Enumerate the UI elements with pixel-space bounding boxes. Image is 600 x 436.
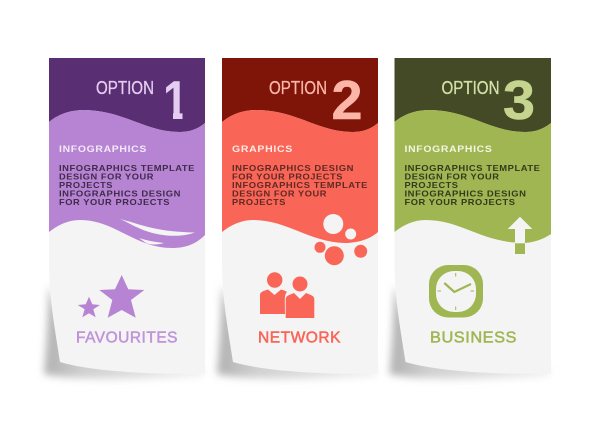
text block xyxy=(232,163,368,207)
subheading: GRAPHICS xyxy=(232,144,293,154)
panel: option 1 xyxy=(44,58,205,379)
text block xyxy=(59,163,195,207)
icon: bubbles xyxy=(314,214,367,265)
icon: people xyxy=(260,272,314,318)
text block: PROJECTS xyxy=(59,180,113,190)
paper sheet xyxy=(222,58,378,374)
text block: INFOGRAPHICS DESIGN xyxy=(232,163,354,173)
text block: PROJECTS xyxy=(404,180,458,190)
colour body xyxy=(49,110,205,248)
header band xyxy=(394,58,551,132)
panel: option 2 xyxy=(217,58,378,379)
colour body xyxy=(222,110,378,243)
text block: DESIGN FOR YOUR xyxy=(404,172,500,182)
text block: DESIGN FOR YOUR xyxy=(232,188,327,198)
text block: INFOGRAPHICS TEMPLATE xyxy=(404,163,540,173)
text block: INFOGRAPHICS TEMPLATE xyxy=(59,163,195,173)
text block: INFOGRAPHICS DESIGN xyxy=(59,188,181,198)
header band xyxy=(222,58,378,132)
number 2: 2 xyxy=(332,69,362,131)
text block xyxy=(404,163,540,207)
header band xyxy=(49,58,205,132)
icon: up arrow xyxy=(508,217,532,254)
text block: PROJECTS xyxy=(232,197,286,207)
label: FAVOURITES xyxy=(76,330,178,346)
white swoosh xyxy=(120,219,195,244)
label: BUSINESS xyxy=(430,330,517,346)
text block: INFOGRAPHICS DESIGN xyxy=(404,188,526,198)
subheading: INFOGRAPHICS xyxy=(404,144,492,154)
paper shadow xyxy=(390,285,550,379)
text block: DESIGN FOR YOUR xyxy=(59,172,154,182)
text block: INFOGRAPHICS TEMPLATE xyxy=(232,180,368,190)
text block: FOR YOUR PROJECTS xyxy=(59,197,170,207)
icon: stars xyxy=(78,275,144,318)
paper sheet xyxy=(49,58,205,374)
paper sheet xyxy=(394,58,551,374)
subheading: INFOGRAPHICS xyxy=(59,144,147,154)
paper shadow xyxy=(44,285,204,379)
colour body xyxy=(394,110,551,243)
heading: option: OPTION xyxy=(96,78,154,98)
text block: FOR YOUR PROJECTS xyxy=(232,172,343,182)
text block: FOR YOUR PROJECTS xyxy=(404,197,516,207)
label: NETWORK xyxy=(258,330,341,346)
icon: clock xyxy=(429,265,483,318)
paper shadow xyxy=(217,285,377,379)
panel: option 3 xyxy=(390,58,551,379)
number 3: 3 xyxy=(503,69,535,131)
number 1: 1 xyxy=(163,69,188,131)
heading: option: OPTION xyxy=(442,78,500,98)
heading: option: OPTION xyxy=(269,78,327,98)
